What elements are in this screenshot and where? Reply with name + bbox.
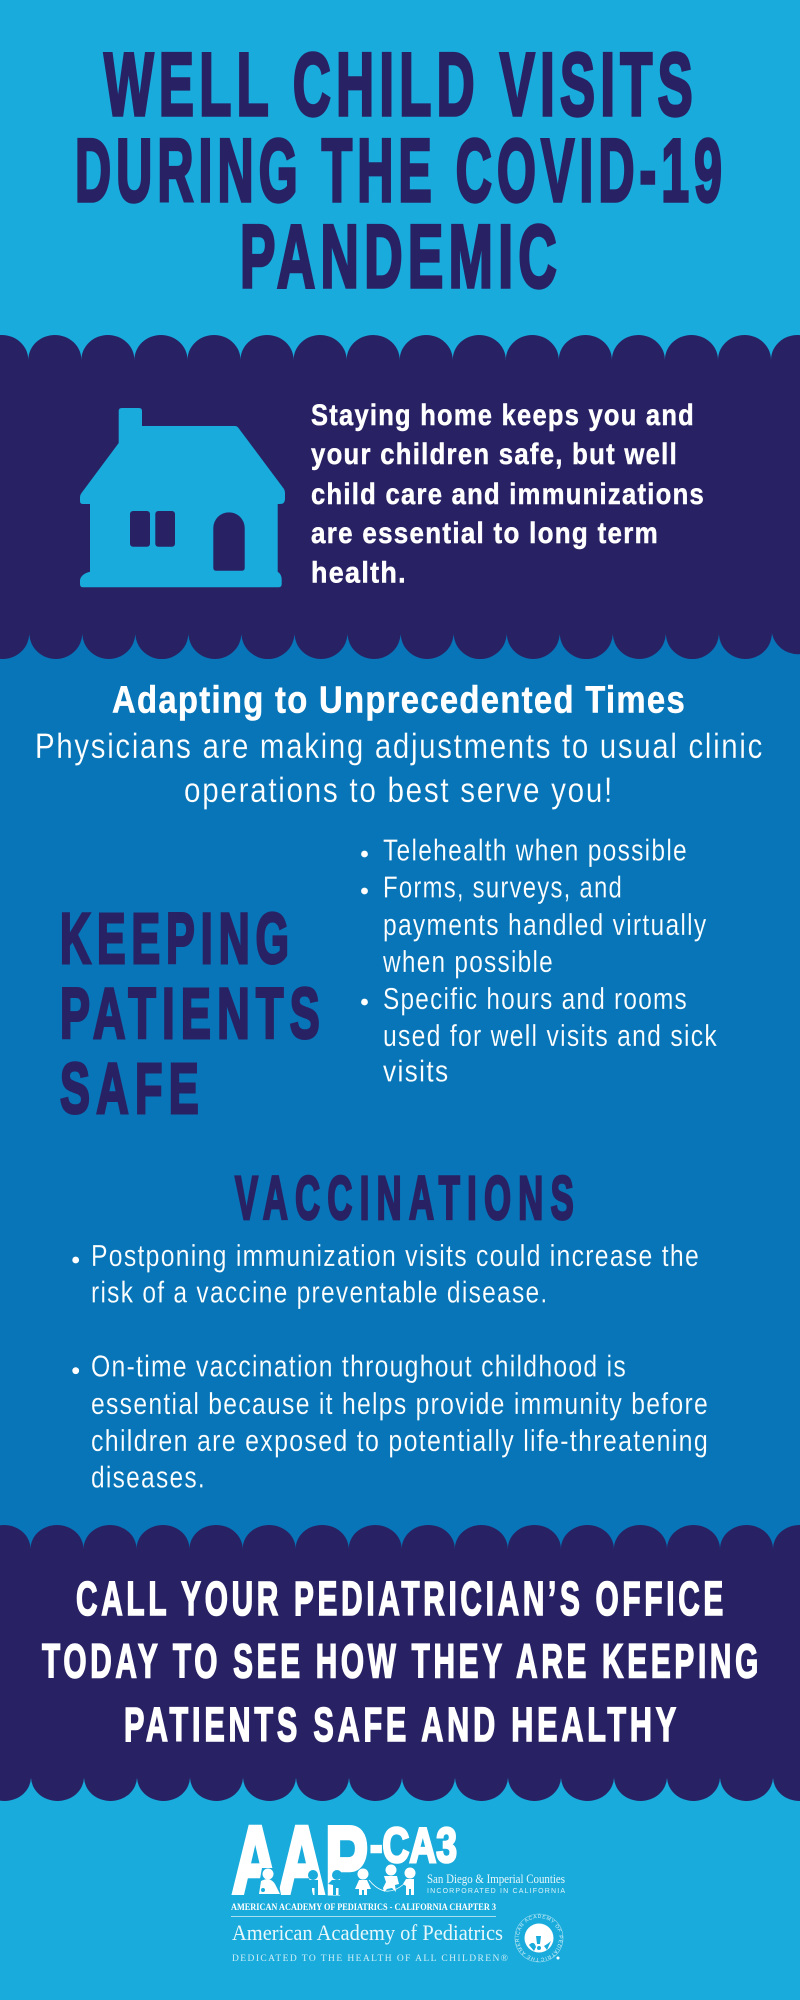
icon: academy seal	[514, 1914, 564, 1962]
list: clinic adjustments: used for well visits and sick	[383, 1018, 718, 1053]
list: vaccinations: diseases.	[91, 1460, 206, 1495]
list: clinic adjustments: visits	[383, 1054, 450, 1089]
title	[75, 34, 727, 306]
heading: keeping patients safe: SAFE	[60, 1050, 205, 1129]
heading: keeping patients safe	[60, 900, 326, 1129]
text block: intro paragraph: child care and immunizations	[311, 478, 705, 511]
heading: adapting: Adapting to Unprecedented Times	[112, 680, 686, 722]
text block: intro paragraph	[311, 399, 705, 590]
callout: call your pediatrician	[42, 1572, 762, 1752]
heading: keeping patients safe: PATIENTS	[60, 975, 326, 1054]
icon: two cut-out children	[306, 1870, 342, 1895]
list: vaccinations	[72, 1238, 709, 1495]
icon: children jumping rope	[355, 1864, 416, 1895]
text block: intro paragraph: health.	[311, 557, 407, 590]
list: clinic adjustments: when possible	[382, 944, 554, 979]
logo: AAP-CA3 with children silhouettes: AAP	[232, 1807, 368, 1914]
icon: house	[80, 408, 285, 587]
icon: academy seal: THE AMERICAN ACADEMY OF PEDIATRICS	[516, 1914, 562, 1962]
text block: physicians: operations to best serve you!	[184, 771, 614, 810]
logo: AAP-CA3 with children silhouettes: San Diego & Imperial Counties	[427, 1871, 565, 1886]
logo: AAP-CA3 with children silhouettes: -CA3	[370, 1819, 457, 1873]
list: clinic adjustments	[361, 833, 718, 1089]
logo: American Academy of Pediatrics: American Academy of Pediatrics	[232, 1920, 503, 1945]
text block: physicians	[35, 727, 764, 810]
list: clinic adjustments: payments handled virtually	[383, 907, 708, 942]
list: vaccinations: On-time vaccination throughout childhood is	[91, 1349, 627, 1384]
title: PANDEMIC	[240, 206, 562, 306]
list: vaccinations: risk of a vaccine preventable disease.	[91, 1275, 548, 1310]
heading: keeping patients safe: KEEPING	[60, 900, 295, 979]
icon: crouching child	[257, 1868, 281, 1895]
list: clinic adjustments: Telehealth when possible	[383, 833, 688, 868]
list: clinic adjustments: Forms, surveys, and	[383, 870, 623, 905]
logo: AAP-CA3 with children silhouettes	[231, 1807, 565, 1917]
logo: American Academy of Pediatrics: DEDICATED TO THE HEALTH OF ALL CHILDREN®	[232, 1953, 508, 1964]
panel: scalloped intro band	[0, 335, 800, 659]
text block: intro paragraph: Staying home keeps you and	[311, 399, 695, 432]
panel: scalloped call-to-action band	[0, 1525, 800, 1801]
text block: intro paragraph: your children safe, but well	[311, 438, 678, 471]
logo: AAP-CA3 with children silhouettes: INCORPORATED IN CALIFORNIA	[427, 1888, 565, 1895]
list: clinic adjustments: Specific hours and rooms	[383, 981, 688, 1016]
text block: intro paragraph: are essential to long term	[311, 517, 659, 550]
logo: American Academy of Pediatrics	[232, 1920, 508, 1964]
logo: AAP-CA3 with children silhouettes: AMERICAN ACADEMY OF PEDIATRICS - CALIFORNIA CHAPTER 3	[231, 1903, 496, 1913]
